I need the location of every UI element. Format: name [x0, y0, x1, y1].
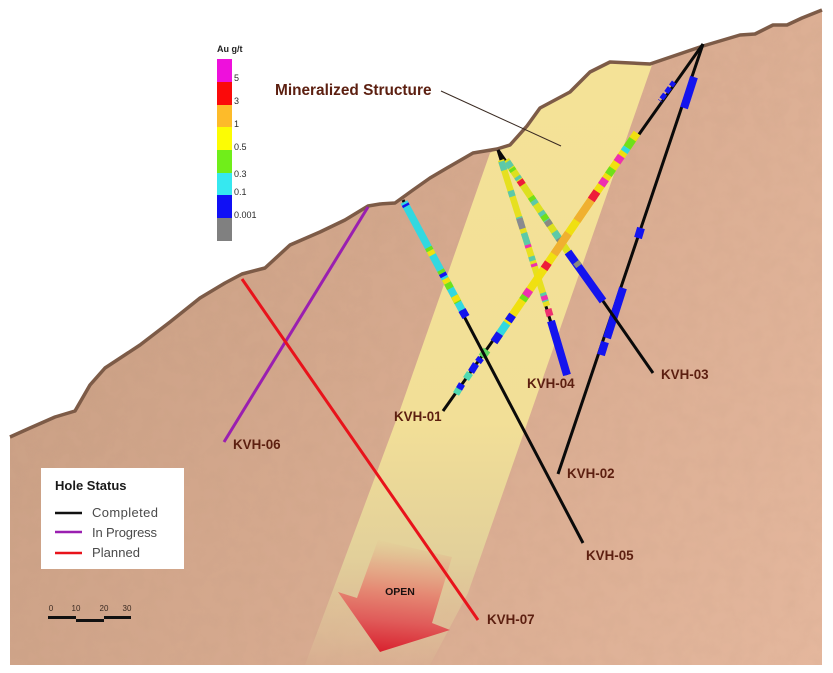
drill hole KVH-05 [403, 200, 583, 543]
gold grade colour legend: 0.5 [234, 142, 247, 152]
drill hole KVH-06 in progress [224, 207, 368, 442]
hole label KVH-06: KVH-06 [233, 437, 281, 452]
scale bar: 20 [100, 604, 109, 613]
panel: hole status legend: Completed [92, 505, 158, 520]
hole label KVH-05: KVH-05 [586, 548, 634, 563]
gold grade colour legend [217, 44, 257, 241]
panel: hole status legend: In Progress [92, 525, 158, 540]
gold grade colour legend: 0.1 [234, 187, 247, 197]
scale bar: 0 [49, 604, 54, 613]
drill hole KVH-01 [443, 44, 703, 411]
panel: hole status legend [41, 468, 184, 569]
scale bar [48, 604, 132, 620]
gold grade colour legend: 5 [234, 73, 239, 83]
legend title: Au g/t [217, 44, 242, 54]
ground surface line [10, 10, 822, 437]
gold grade colour legend: 0.001 [234, 210, 257, 220]
arrow: open at depth [338, 540, 452, 652]
mineralized structure band [305, 62, 652, 665]
legend heading: Hole Status [55, 478, 127, 493]
drill hole KVH-04 [498, 150, 567, 375]
leader line [441, 91, 561, 146]
gold grade colour legend: 0.3 [234, 169, 247, 179]
panel: hole status legend: Planned [92, 545, 140, 560]
gold grade colour legend: 3 [234, 96, 239, 106]
hole label KVH-03: KVH-03 [661, 367, 709, 382]
hole label KVH-07: KVH-07 [487, 612, 535, 627]
scale bar: 10 [72, 604, 81, 613]
hole label KVH-01: KVH-01 [394, 409, 442, 424]
drill hole KVH-02 [558, 44, 703, 474]
hole label KVH-02: KVH-02 [567, 466, 615, 481]
drill hole KVH-03 [498, 150, 653, 373]
arrow label: OPEN [385, 586, 415, 598]
drill hole KVH-07 planned [242, 279, 478, 620]
title: Mineralized Structure: Mineralized Structure [275, 82, 432, 99]
hole label KVH-04: KVH-04 [527, 376, 575, 391]
scale bar: 30 [123, 604, 132, 613]
gold grade colour legend: 1 [234, 119, 239, 129]
